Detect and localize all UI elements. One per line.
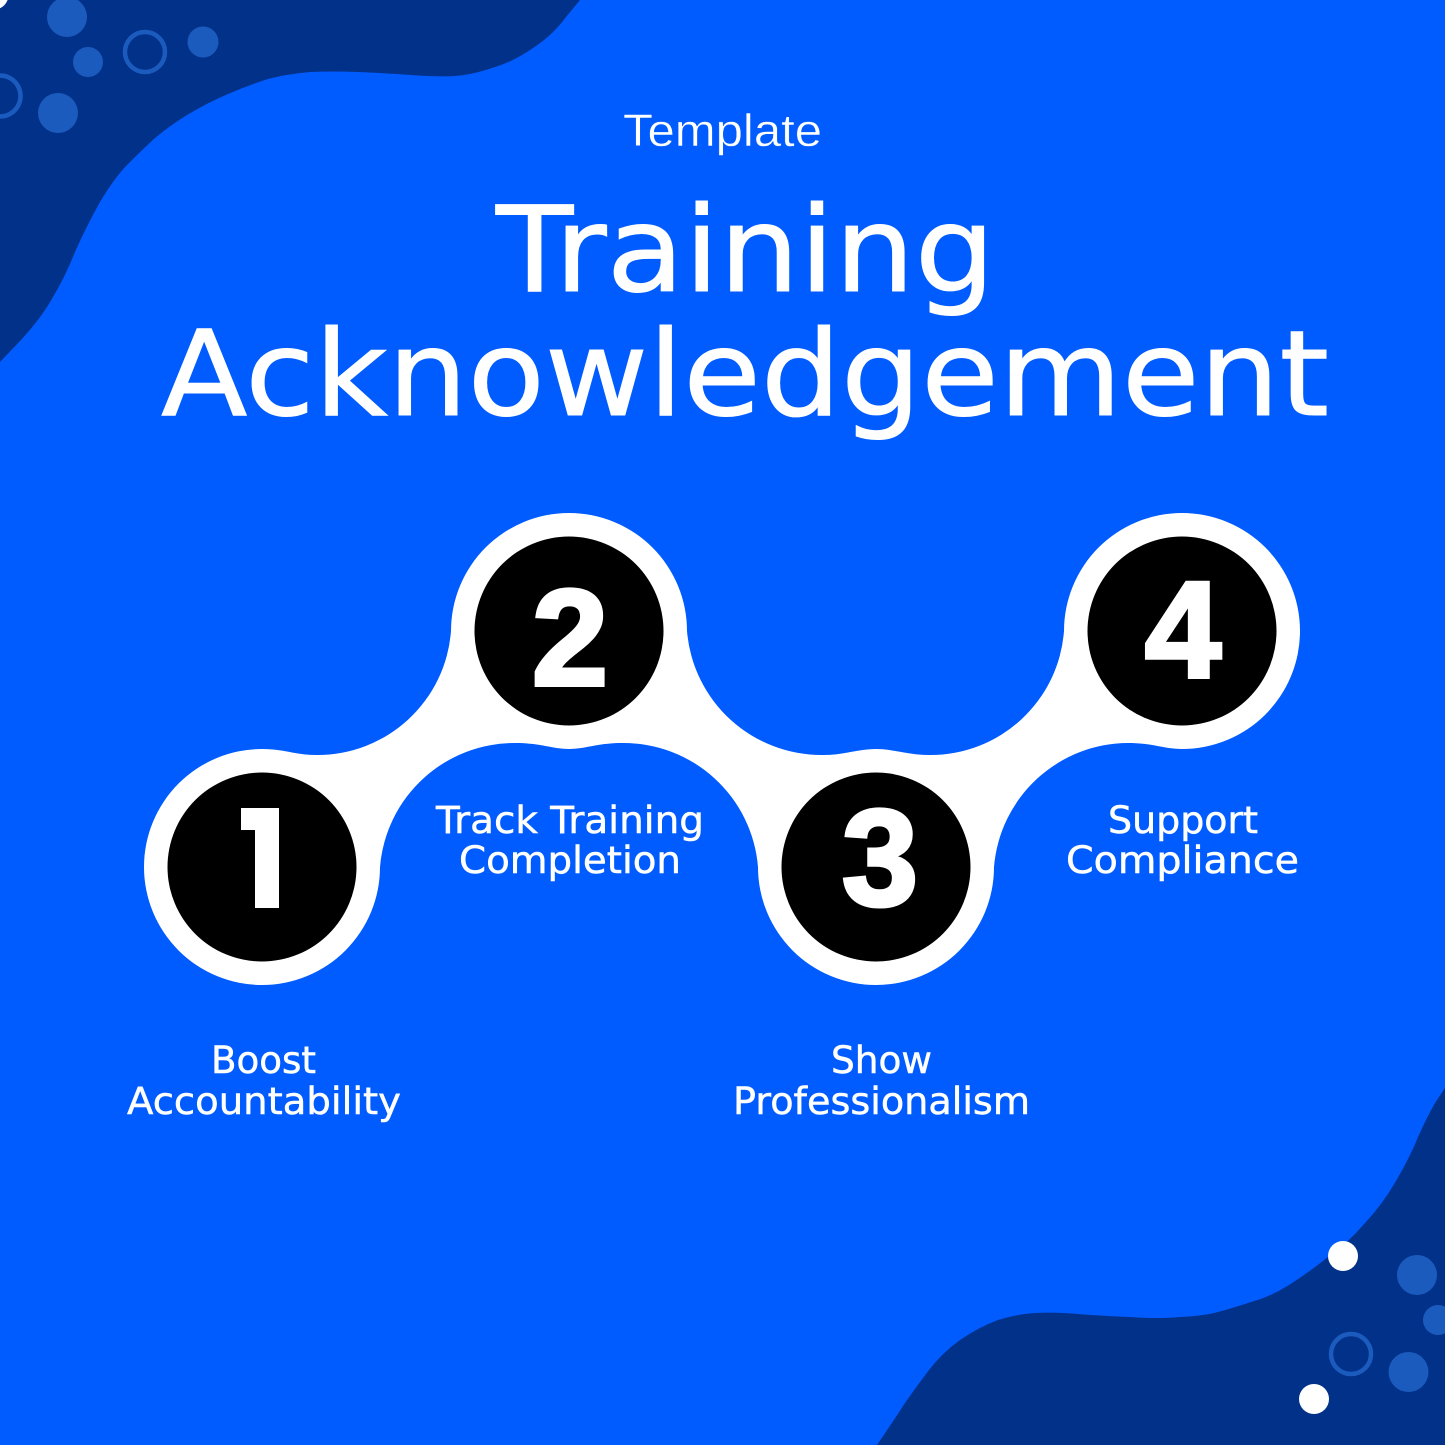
step 2 badge: 2 — [532, 562, 608, 715]
label: Support Compliance: Compliance — [1066, 839, 1299, 882]
title: Training Acknowledgement: Training — [495, 182, 995, 320]
label: Show Professionalism — [733, 1039, 1030, 1123]
label: Show Professionalism: Show — [831, 1039, 932, 1082]
decoration: top-left corner blob with dots — [0, 0, 580, 362]
step 1 badge: 1 — [227, 783, 303, 936]
decoration: bottom-right corner blob with dots — [877, 1088, 1445, 1445]
label: Boost Accountability: Accountability — [127, 1080, 401, 1123]
label: Track Training Completion: Completion — [459, 839, 681, 882]
subtitle: Template: Template — [623, 105, 822, 156]
step 2 badge — [474, 536, 664, 726]
white connector shape — [144, 513, 1300, 985]
title: Training Acknowledgement: Acknowledgement — [161, 306, 1329, 444]
label: Track Training Completion: Track Training — [435, 799, 704, 842]
label: Show Professionalism: Professionalism — [733, 1080, 1030, 1123]
title: Training Acknowledgement — [161, 182, 1329, 444]
step 4 badge: 4 — [1145, 554, 1221, 707]
label: Track Training Completion — [435, 799, 704, 882]
step 4 badge — [1088, 536, 1276, 726]
label: Boost Accountability: Boost — [211, 1039, 316, 1082]
step 3 badge — [782, 772, 970, 962]
label: Support Compliance — [1066, 799, 1299, 882]
step 3 badge: 3 — [842, 782, 918, 935]
label: Support Compliance: Support — [1108, 799, 1258, 842]
step 1 badge — [168, 772, 356, 962]
process chain: four linked numbered steps — [144, 513, 1300, 985]
label: Boost Accountability — [127, 1039, 401, 1123]
